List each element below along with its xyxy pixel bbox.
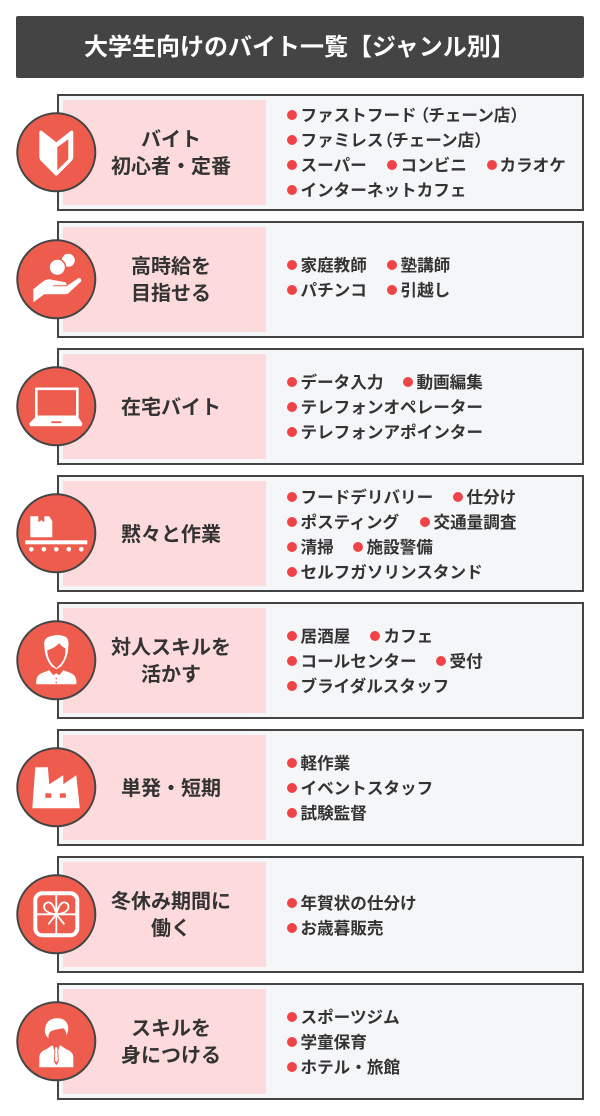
list: quiet work jobs	[287, 488, 516, 582]
list: high pay jobs: パチンコ	[300, 281, 367, 300]
list: quiet work jobs: 仕分け	[466, 488, 516, 507]
heading: gain skills	[121, 1018, 221, 1067]
heading: gain skills: スキルを	[131, 1018, 211, 1040]
heading: winter break: 冬休み期間に	[111, 891, 231, 913]
list: gain skills jobs: 学童保育	[300, 1033, 367, 1052]
icon: hand with coins	[17, 240, 95, 318]
icon: laptop	[17, 367, 95, 445]
list: one-off jobs	[287, 754, 433, 823]
icon: conveyor belt	[17, 494, 95, 572]
list: people skills jobs: 居酒屋	[300, 627, 350, 646]
list: beginner jobs	[287, 106, 566, 200]
panel: remote	[57, 348, 584, 465]
heading: high pay: 高時給を	[131, 256, 211, 278]
heading: quiet work: 黙々と作業	[121, 524, 221, 546]
list: gain skills jobs: スポーツジム	[300, 1008, 400, 1027]
list: quiet work jobs: 施設警備	[366, 538, 433, 557]
list: people skills jobs: ブライダルスタッフ	[300, 677, 449, 696]
list: one-off jobs: 軽作業	[300, 754, 350, 773]
list: high pay jobs: 家庭教師	[300, 256, 367, 275]
list: beginner jobs: カラオケ	[500, 156, 566, 175]
list: people skills jobs	[287, 627, 483, 696]
heading: beginner: 初心者・定番	[111, 156, 231, 178]
panel: people skills	[57, 602, 584, 719]
heading: beginner: バイト	[141, 129, 201, 151]
list: people skills jobs: カフェ	[384, 627, 433, 646]
icon: factory	[17, 748, 95, 826]
heading: people skills	[111, 636, 231, 686]
heading: one-off: 単発・短期	[121, 778, 221, 800]
list: winter break jobs: お歳暮販売	[300, 919, 383, 938]
list: remote jobs: 動画編集	[416, 373, 483, 392]
list: remote jobs: テレフォンアポインター	[300, 423, 483, 442]
list: beginner jobs: コンビニ	[400, 156, 467, 175]
icon: staff person	[17, 621, 95, 699]
list: quiet work jobs: 清掃	[300, 538, 334, 557]
list: people skills jobs: 受付	[450, 652, 483, 671]
heading: gain skills: 身につける	[121, 1045, 221, 1067]
list: people skills jobs: コールセンター	[300, 652, 417, 671]
list: high pay jobs	[287, 256, 450, 300]
heading: high pay	[131, 256, 211, 305]
list: gain skills jobs: ホテル・旅館	[300, 1058, 400, 1077]
panel: high pay	[57, 221, 584, 338]
panel: gain skills	[57, 983, 584, 1100]
heading: remote: 在宅バイト	[121, 397, 221, 419]
panel: beginner	[57, 94, 584, 211]
list: remote jobs: テレフォンオペレーター	[300, 398, 483, 417]
list: quiet work jobs: ポスティング	[300, 513, 399, 532]
list: quiet work jobs: 交通量調査	[434, 513, 516, 532]
heading: people skills: 活かす	[141, 664, 201, 686]
list: remote jobs	[287, 373, 483, 442]
title: 大学生向けのバイト一覧【ジャンル別】	[84, 34, 515, 61]
list: beginner jobs: スーパー	[300, 156, 367, 175]
list: high pay jobs: 引越し	[400, 281, 450, 300]
list: quiet work jobs: セルフガソリンスタンド	[300, 563, 483, 582]
heading: high pay: 目指せる	[131, 283, 211, 305]
panel: quiet work	[57, 475, 584, 592]
list: quiet work jobs: フードデリバリー	[300, 488, 433, 507]
heading: people skills: 対人スキルを	[111, 637, 231, 659]
heading: winter break	[111, 890, 231, 940]
list: winter break jobs: 年賀状の仕分け	[300, 894, 417, 913]
heading: beginner	[111, 129, 231, 178]
list: winter break jobs	[287, 894, 417, 938]
panel: winter break	[57, 856, 584, 973]
icon: gift	[17, 875, 95, 953]
list: beginner jobs: インターネットカフェ	[300, 181, 466, 200]
list: remote jobs: データ入力	[300, 373, 383, 392]
list: beginner jobs: ファストフード（チェーン店）	[300, 106, 527, 125]
title	[16, 16, 584, 78]
icon: suit person	[17, 1002, 95, 1080]
list: gain skills jobs	[287, 1008, 400, 1077]
list: high pay jobs: 塾講師	[400, 256, 450, 275]
panel: one-off	[57, 729, 584, 846]
list: one-off jobs: イベントスタッフ	[300, 779, 433, 798]
icon: beginner mark	[17, 113, 95, 191]
heading: winter break: 働く	[151, 918, 191, 940]
list: beginner jobs: ファミレス（チェーン店）	[300, 131, 491, 150]
list: one-off jobs: 試験監督	[300, 804, 367, 823]
